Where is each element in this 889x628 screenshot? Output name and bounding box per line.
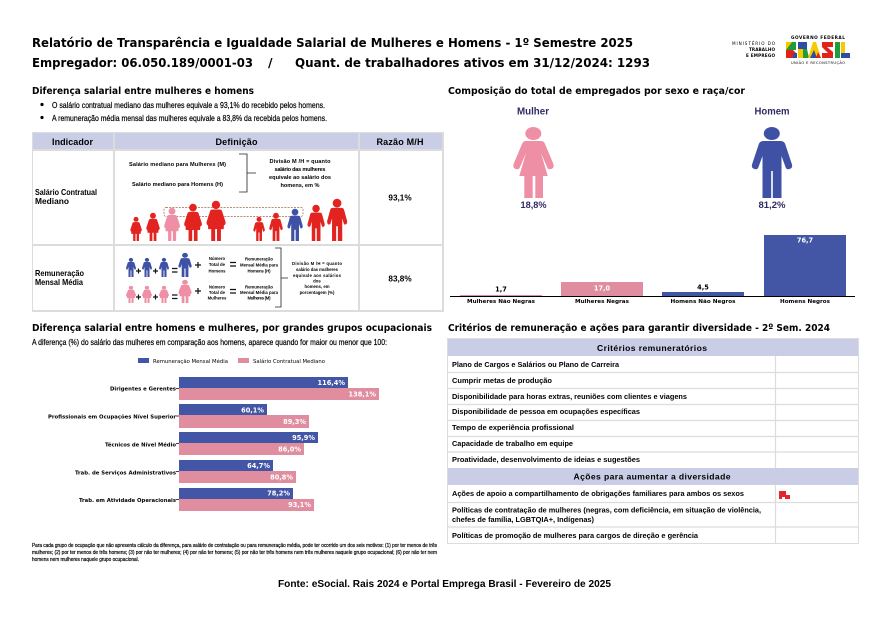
icon: mulher 18,8%: [513, 106, 554, 211]
footnote: [32, 543, 437, 563]
icon: homem 81,2%: [752, 106, 792, 211]
table: indicadores salariais: 83,8%: [388, 274, 412, 284]
footnote: homens nem mulheres naquele grupo ocupacional.: [32, 557, 139, 563]
legend: Salário Contratual Mediano: [253, 358, 325, 365]
bar chart: grupos ocupacionais: Profissionais em Ocupações Nível Superior: [48, 414, 176, 420]
definição: salário mediano: Salário mediano para Mulheres (M): [129, 162, 226, 168]
table: critérios e ações: Ações para aumentar a diversidade: [574, 472, 731, 482]
bar chart: sexo e raça/cor: Homens Negros: [780, 299, 831, 305]
bar chart: grupos ocupacionais: 116,4%: [318, 379, 345, 387]
bar chart: grupos ocupacionais: Dirigentes e Gerentes: [110, 386, 177, 392]
heading: composição: Composição do total de empregados por sexo e raça/cor: [448, 86, 745, 97]
definição: remuneração média: Homens (H): [248, 268, 271, 274]
table: critérios e ações: Capacidade de trabalho em equipe: [452, 439, 573, 448]
definição: remuneração média: Remuneração: [245, 284, 273, 290]
definição: remuneração média: Número: [209, 256, 225, 261]
table: indicadores salariais: Mensal Média: [35, 277, 83, 287]
source: Fonte: eSocial. Rais 2024 e Portal Emprega Brasil - Fevereiro de 2025: [278, 578, 611, 590]
definição: remuneração média: Divisão M /H = quanto: [292, 261, 342, 266]
icon: mulher 18,8%: Mulher: [517, 106, 549, 118]
bar chart: sexo e raça/cor: 4,5: [697, 284, 709, 292]
definição: remuneração média: [126, 248, 342, 307]
definição: remuneração média: Remuneração: [245, 256, 273, 262]
logo: ministério e governo federal: GOVERNO FEDERAL: [791, 35, 845, 41]
definição: remuneração média: Total de: [209, 290, 226, 295]
table: critérios e ações: Políticas de promoção de mulheres para cargos de direção e gerência: [452, 531, 699, 540]
bar chart: grupos ocupacionais: 93,1%: [288, 501, 311, 509]
bar chart: sexo e raça/cor: [450, 235, 855, 305]
table: critérios e ações: Políticas de contratação de mulheres (negras, com deficiência, em situação de violência,: [452, 506, 761, 514]
legend: [138, 358, 325, 365]
definição: remuneração média: dos: [313, 278, 321, 284]
footnote: mulheres; (2) por ter menos de três homens; (3) por não ter mulheres; (4) por não ter homens; (5) por não ter três homens nem três mulheres naquele grupo ocupacional; (6) por não ter nem: [32, 550, 437, 556]
bar chart: grupos ocupacionais: 60,1%: [241, 406, 264, 414]
title: Quant. de trabalhadores ativos em 31/12/2024: 1293: [295, 55, 650, 70]
table: indicadores salariais: Definição: [216, 137, 258, 147]
heading: grupos ocupacionais: Diferença salarial entre homens e mulheres, por grandes grupos ocupacionais: [32, 323, 432, 334]
definição: remuneração média: Mensal Média para: [240, 262, 279, 268]
title: Relatório de Transparência e Igualdade Salarial de Mulheres e Homens - 1º Semestre 2025: [32, 35, 633, 50]
definição: remuneração média: Mulheres (M): [248, 296, 271, 300]
table: critérios e ações: Plano de Cargos e Salários ou Plano de Carreira: [452, 360, 620, 369]
table: indicadores salariais: Mediano: [35, 196, 69, 206]
definição: salário mediano: equivale ao salário dos: [269, 175, 331, 181]
bar chart: sexo e raça/cor: 1,7: [495, 286, 507, 294]
title: [32, 35, 650, 70]
table: critérios e ações: Disponibilidade de pessoa em ocupações específicas: [452, 407, 640, 416]
footnote: Para cada grupo de ocupação que não apresenta cálculo da diferença, para salário de contratação ou para remuneração média, pode ter ocorrido um dos seis motivos: (1) por ter menos de três: [32, 543, 437, 549]
definição: remuneração média: Total de: [209, 262, 226, 267]
heading: grupos ocupacionais: [32, 323, 432, 347]
definição: salário mediano: homens, em %: [280, 183, 320, 189]
logo: ministério e governo federal: [732, 35, 850, 65]
bar chart: grupos ocupacionais: 78,2%: [267, 490, 290, 498]
definição: remuneração média: homens, em: [304, 284, 330, 289]
logo: ministério e governo federal: MINISTÉRIO DO: [732, 41, 776, 46]
icon: marcador vermelho: [779, 491, 790, 499]
bullet list: A remuneração média mensal das mulheres equivale a 83,8% da recebida pelos homens.: [52, 113, 327, 123]
bar chart: grupos ocupacionais: [48, 377, 379, 511]
logo: ministério e governo federal: TRABALHO: [749, 47, 775, 52]
bar chart: sexo e raça/cor: Homens Não Negros: [670, 299, 736, 305]
definição: remuneração média: salário das mulheres: [296, 267, 339, 272]
table: indicadores salariais: Salário Contratual: [35, 187, 97, 197]
bar chart: sexo e raça/cor: 76,7: [797, 236, 814, 244]
bar chart: sexo e raça/cor: 17,0: [594, 284, 611, 292]
table: critérios e ações: Ações de apoio a compartilhamento de obrigações familiares para ambos os sexos: [452, 489, 744, 498]
definição: salário mediano: Divisão M /H = quanto: [270, 159, 331, 165]
table: indicadores salariais: Razão M/H: [376, 137, 424, 147]
heading: critérios: Critérios de remuneração e ações para garantir diversidade - 2º Sem. 2024: [448, 322, 830, 334]
bar chart: grupos ocupacionais: 86,0%: [278, 446, 301, 454]
bar chart: grupos ocupacionais: 138,1%: [349, 390, 376, 398]
bullet list: O salário contratual mediano das mulheres equivale a 93,1% do recebido pelos homens.: [52, 100, 325, 110]
table: indicadores salariais: 93,1%: [388, 194, 412, 202]
logo: ministério e governo federal: E EMPREGO: [746, 53, 775, 58]
definição: remuneração média: porcentagem (%): [300, 290, 335, 295]
title: /: [268, 55, 273, 70]
icon: homem 81,2%: 81,2%: [758, 200, 786, 211]
heading: diferença salarial: Diferença salarial entre mulheres e homens: [32, 86, 254, 97]
bar chart: grupos ocupacionais: Técnicos de Nível Médio: [105, 442, 176, 448]
bar chart: sexo e raça/cor: Mulheres Não Negras: [467, 299, 536, 305]
bar chart: grupos ocupacionais: 80,8%: [270, 474, 293, 482]
definição: salário mediano: [129, 154, 347, 241]
bar chart: grupos ocupacionais: Trab. de Serviços Administrativos: [75, 470, 177, 476]
bar chart: grupos ocupacionais: 89,3%: [283, 418, 306, 426]
definição: remuneração média: Homens: [209, 268, 226, 274]
bullet list: [40, 100, 327, 123]
table: critérios e ações: Cumprir metas de produção: [452, 376, 552, 385]
bar chart: grupos ocupacionais: 64,7%: [247, 462, 270, 470]
bar chart: grupos ocupacionais: Trab. em Atividade Operacionais: [79, 498, 177, 504]
table: critérios e ações: Critérios remuneratórios: [597, 343, 707, 353]
definição: remuneração média: equivale aos salários: [293, 273, 342, 278]
logo: ministério e governo federal: UNIÃO E RECONSTRUÇÃO: [791, 60, 845, 65]
table: critérios e ações: Tempo de experiência profissional: [452, 423, 574, 432]
icon: mulher 18,8%: 18,8%: [520, 200, 547, 211]
table: indicadores salariais: Indicador: [52, 137, 93, 147]
definição: salário mediano: Salário mediano para Homens (H): [132, 182, 223, 188]
table: critérios e ações: [448, 338, 858, 544]
table: critérios e ações: chefes de família, LGBTQIA+, Indígenas): [452, 515, 595, 524]
definição: salário mediano: salário das mulheres: [274, 167, 326, 173]
definição: remuneração média: Mulheres: [208, 296, 227, 300]
icon: homem 81,2%: Homem: [754, 106, 790, 118]
heading: grupos ocupacionais: A diferença (%) do salário das mulheres em comparação aos homens, aparece quando for maior ou menor que 100:: [32, 337, 387, 347]
definição: remuneração média: Número: [209, 284, 225, 290]
bar chart: grupos ocupacionais: 95,9%: [292, 434, 315, 442]
definição: remuneração média: Mensal Média para: [240, 290, 279, 295]
bar chart: sexo e raça/cor: Mulheres Negras: [575, 299, 630, 305]
table: indicadores salariais: [32, 132, 444, 312]
title: Empregador: 06.050.189/0001-03: [32, 55, 253, 70]
table: critérios e ações: Disponibilidade para horas extras, reuniões com clientes e viagens: [452, 392, 687, 401]
legend: Remuneração Mensal Média: [153, 358, 228, 365]
table: critérios e ações: Proatividade, desenvolvimento de ideias e sugestões: [452, 455, 640, 464]
table: indicadores salariais: Remuneração: [35, 268, 84, 278]
